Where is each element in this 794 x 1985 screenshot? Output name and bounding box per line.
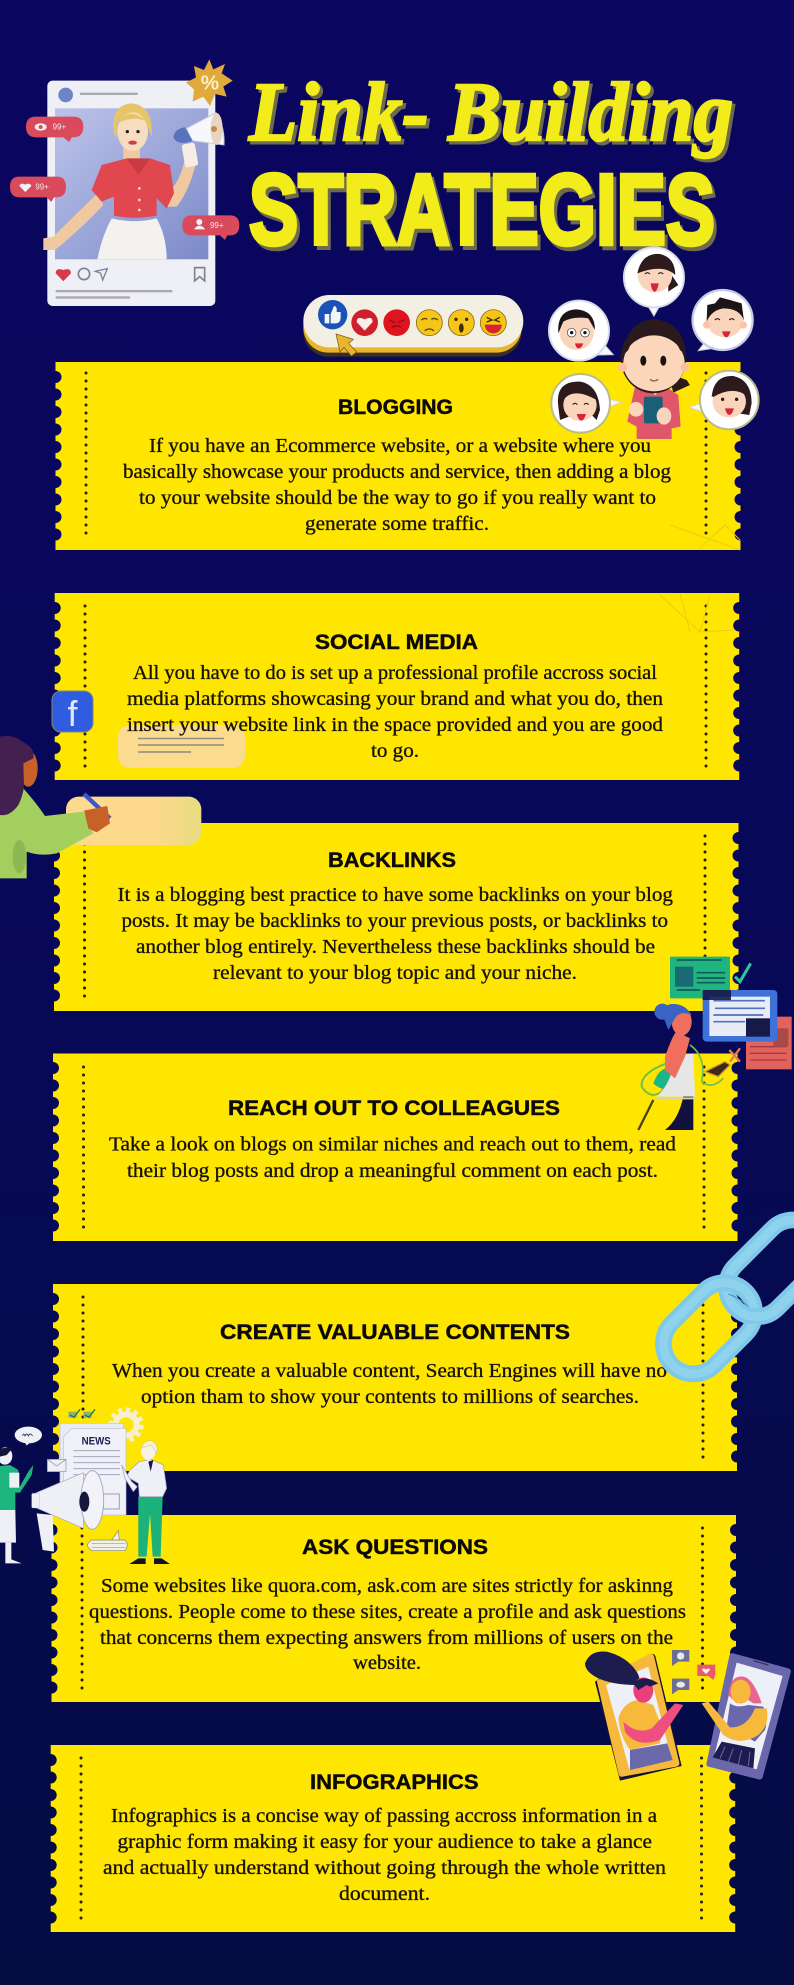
illustration: social post with woman and megaphone [10, 59, 239, 306]
illustration: people in phones [585, 1650, 791, 1781]
body text: blogging: generate some traffic. [305, 513, 489, 535]
body text: backlinks: another blog entirely. Nevertheless these backlinks should be [136, 936, 655, 958]
body text: infographics: Infographics is a concise way of passing accross information in a [111, 1805, 657, 1827]
bubble: lower right face [689, 371, 759, 429]
body text: backlinks: posts. It may be backlinks to your previous posts, or backlinks to [122, 910, 668, 932]
girl with phone [618, 319, 690, 439]
body text: create valuable contents [112, 1360, 667, 1408]
body text: backlinks [118, 884, 673, 984]
body text: ask questions: Some websites like quora.com, ask.com are sites strictly for askinng [101, 1575, 673, 1597]
illustration: woman writing on note [0, 736, 201, 878]
title: link-building: Link- Building [248, 66, 733, 159]
title: link-building: Link- Building [251, 69, 736, 162]
body text: blogging: to your website should be the way to go if you really want to [139, 487, 656, 509]
illustration: social post with woman and megaphone: 99+ [210, 221, 224, 230]
heading: reach out to colleagues: REACH OUT TO COLLEAGUES [228, 1097, 560, 1120]
panel: blogging [56, 362, 740, 550]
body text: social media: All you have to do is set up a professional profile accross social [133, 662, 657, 684]
body text: reach out to colleagues: their blog posts and drop a meaningful comment on each post. [127, 1160, 658, 1182]
body text: social media: media platforms showcasing your brand and what you do, then [127, 688, 663, 710]
icon: facebook [52, 691, 93, 734]
panel: ask questions [52, 1515, 736, 1702]
body text: ask questions: that concerns them expecting answers from millions of users on the [100, 1627, 673, 1649]
illustration: social post with woman and megaphone: 99+ [35, 183, 49, 192]
heading: create valuable contents: CREATE VALUABLE CONTENTS [220, 1321, 570, 1344]
panel: reach out to colleagues [53, 1054, 738, 1241]
bubble: lower left face [551, 374, 622, 433]
illustration: social post with woman and megaphone: 99+ [53, 123, 67, 132]
bubble: left face [549, 301, 613, 361]
body text: blogging: basically showcase your products and service, then adding a blog [123, 461, 671, 483]
body text: social media: insert your website link in the space provided and you are good [127, 714, 663, 736]
panel: create valuable contents [53, 1284, 737, 1471]
body text: reach out to colleagues [109, 1134, 676, 1182]
body text: backlinks: It is a blogging best practice to have some backlinks on your blog [118, 884, 673, 906]
body text: infographics: and actually understand without going through the whole written [103, 1857, 666, 1879]
illustration: woman reviewing documents [638, 957, 792, 1130]
illustration: girl with speech bubbles [549, 247, 759, 439]
icon: facebook: f [67, 693, 78, 734]
body text: ask questions: website. [353, 1652, 421, 1674]
heading: ask questions: ASK QUESTIONS [302, 1536, 488, 1559]
body text: ask questions [89, 1575, 686, 1674]
panel: social media [55, 593, 739, 780]
illustration: chain link [651, 1208, 794, 1386]
body text: create valuable contents: option tham to show your contents to millions of searches. [141, 1386, 639, 1408]
illustration: social post with woman and megaphone: % [201, 71, 219, 94]
body text: blogging: If you have an Ecommerce website, or a website where you [149, 435, 651, 457]
body text: infographics: graphic form making it easy for your audience to take a glance [118, 1831, 652, 1853]
body text: reach out to colleagues: Take a look on blogs on similar niches and reach out to them, read [109, 1134, 676, 1156]
body text: ask questions: questions. People come to these sites, create a profile and ask questions [89, 1601, 686, 1623]
illustration: news and megaphone [0, 1409, 170, 1564]
body text: social media: to go. [371, 740, 419, 762]
body text: infographics: document. [339, 1883, 430, 1905]
bubble: top face [624, 247, 684, 316]
heading: social media: SOCIAL MEDIA [315, 631, 478, 654]
panel: infographics [51, 1745, 735, 1932]
heading: infographics: INFOGRAPHICS [310, 1771, 478, 1794]
body text: blogging [123, 435, 671, 535]
sticky note [118, 725, 245, 768]
icon: reaction bar [303, 295, 523, 357]
heading: backlinks: BACKLINKS [328, 849, 456, 872]
body text: infographics [103, 1805, 666, 1905]
body text: create valuable contents: When you create a valuable content, Search Engines will have no [112, 1360, 667, 1382]
body text: social media [127, 662, 663, 762]
illustration: news and megaphone: NEWS [82, 1435, 111, 1447]
bubble: right face [693, 290, 753, 351]
panel: backlinks [54, 823, 738, 1011]
body text: backlinks: relevant to your blog topic and your niche. [213, 962, 577, 984]
heading: blogging: BLOGGING [338, 396, 453, 419]
